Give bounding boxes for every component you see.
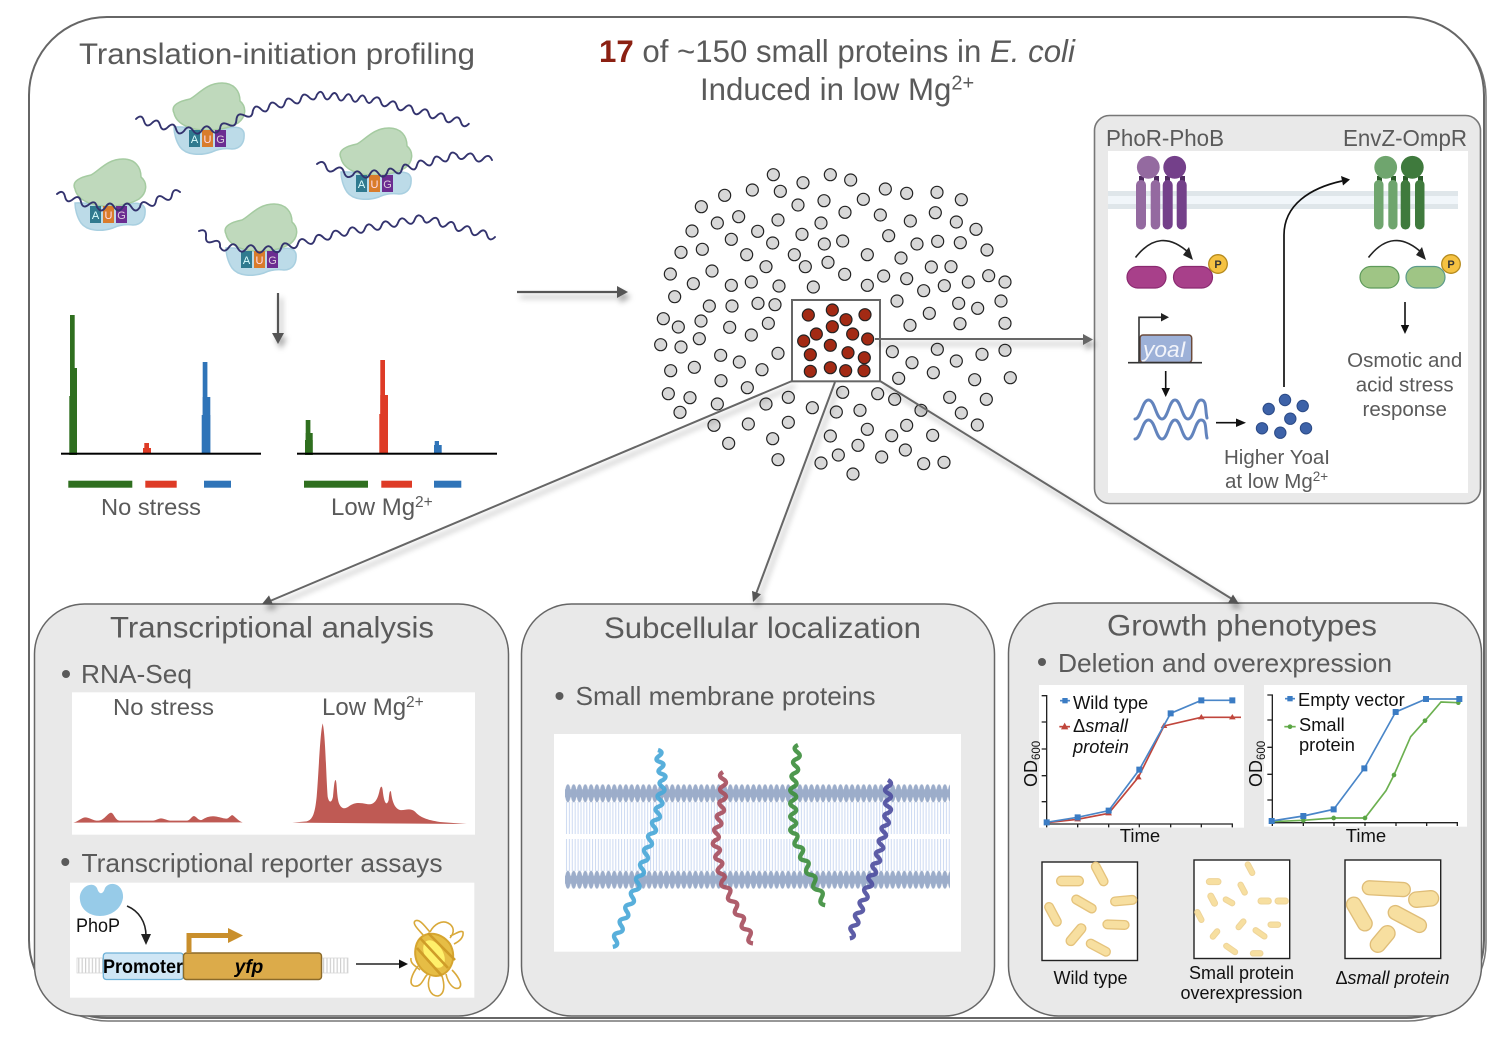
PhoB phosphorylation: [1127, 241, 1227, 288]
transcripts: [1135, 400, 1207, 439]
helix: red: [713, 772, 753, 943]
heading: 17 of 150 small proteins: Induced in low Mg: [700, 72, 951, 107]
heading: 17 of 150 small proteins: [599, 34, 1076, 107]
arrow: profiling to protein field: [517, 286, 628, 298]
label: PhoP: PhoP: [76, 916, 120, 937]
ribosome 1: A: [191, 134, 199, 146]
label: EnvZ-OmpR: EnvZ-OmpR: [1343, 125, 1467, 151]
legend text: Empty vector: [1298, 689, 1405, 710]
trace: low Mg: [292, 723, 467, 824]
cells: deletion: [1344, 860, 1441, 958]
transcription arrow: [189, 928, 243, 953]
ribosome 4: G: [268, 255, 277, 267]
label: osmotic and acid stress response: acid stress: [1356, 374, 1454, 396]
YoaI protein dots: [1256, 394, 1312, 438]
yfp gene: yfp: [234, 957, 263, 978]
label: small protein overexpression: Small protein: [1189, 963, 1294, 983]
arrow: ribosomes to profiles: [272, 293, 284, 344]
label: no stress: No stress: [113, 694, 214, 720]
heading: Subcellular localization: [604, 612, 921, 645]
cells: overexpression: [1194, 860, 1290, 958]
label: no stress: No stress: [101, 494, 201, 520]
ribosome 1: G: [216, 134, 225, 146]
heading: Transcriptional analysis: [110, 612, 434, 644]
arrow: transcript to protein: [1216, 418, 1246, 427]
red induced proteins: [798, 304, 874, 377]
receptor: EnvZ: [1374, 156, 1424, 230]
panel: transcriptional analysis: [34, 604, 508, 1016]
mRNA strands: [57, 92, 495, 253]
gene: yoaI: yoaI: [1141, 337, 1186, 362]
protein dots field: [655, 169, 1016, 480]
y label: OD: [1246, 760, 1266, 787]
PhoB phosphorylation: P: [1214, 259, 1222, 271]
yfp gene: [184, 953, 322, 980]
panel: two-component pathway: [1094, 116, 1480, 504]
overexpression curve: [1272, 700, 1461, 823]
icon: PhoP: [80, 884, 123, 916]
ribosome 3: G: [117, 210, 126, 222]
icon: YFP protein: [411, 920, 463, 996]
chart: empty vector vs overexpression: [1246, 685, 1467, 846]
membrane illustration: [554, 734, 961, 952]
ribosome 1: [173, 83, 245, 154]
OmpR phosphorylation: [1360, 241, 1460, 288]
heading: 17 of 150 small proteins: 17 of ~150 small proteins in E. coli: [599, 34, 1076, 69]
y label: 600: [1256, 741, 1268, 760]
OmpR phosphorylation: P: [1447, 259, 1455, 271]
bullet: small membrane proteins: Small membrane proteins: [576, 681, 876, 711]
arrow: PhoP to promoter: [127, 906, 151, 945]
y label: 600: [1031, 741, 1043, 760]
label: osmotic and acid stress response: response: [1363, 398, 1447, 421]
ribosome 4: [225, 204, 297, 275]
label: higher YoaI: at low Mg: [1225, 470, 1313, 493]
empty vector curve: [1269, 696, 1462, 824]
trace: no stress: [73, 813, 243, 823]
arrow: box to pathway panel: [875, 334, 1093, 345]
legend text: Small: [1299, 714, 1345, 735]
label: small protein overexpression: [1180, 963, 1303, 1003]
label: low Mg: 2+: [415, 494, 433, 511]
x label: Time: [1346, 825, 1386, 846]
legend text: Δsmall: [1073, 715, 1129, 736]
gray small proteins: [655, 169, 1016, 480]
arrow: box to transcriptional analysis: [262, 381, 792, 605]
receptor: PhoR: [1136, 156, 1187, 230]
arrow: OmpR to response: [1401, 302, 1409, 334]
ribosome 2: G: [383, 179, 392, 191]
ribosome 4: A: [243, 255, 251, 267]
chart: no stress ribosome profile: [61, 315, 261, 488]
axes: [1267, 695, 1457, 826]
legend text: [1072, 692, 1148, 757]
wild type curve: [1044, 697, 1235, 825]
chart: low Mg ribosome profile: [297, 360, 497, 488]
label: higher YoaI: 2+: [1313, 469, 1328, 484]
arrow: YoaI to EnvZ: [1284, 176, 1350, 387]
deletion curve: [1047, 714, 1241, 823]
ribosome 1: U: [204, 134, 212, 146]
legend markers: [1284, 696, 1296, 729]
panel: subcellular localization: [522, 604, 994, 1016]
bullet: deletion and overexpression: Deletion and overexpression: [1058, 648, 1392, 678]
legend text: protein: [1299, 734, 1355, 755]
x label: Time: [1120, 825, 1160, 846]
panel: growth phenotypes: [1008, 603, 1482, 1016]
promoter box: Promoter: [103, 957, 184, 978]
arrow: box to growth phenotypes: [880, 381, 1239, 604]
ribosome 3: A: [92, 210, 100, 222]
helix: purple: [850, 780, 891, 938]
label: higher YoaI: Higher YoaI: [1224, 446, 1330, 469]
gene: yoaI: [1128, 313, 1202, 363]
cells: wild type: [1042, 861, 1138, 960]
legend text: Wild type: [1073, 692, 1148, 713]
bullet: RNA-Seq: RNA-Seq: [81, 659, 192, 689]
helix: green: [790, 745, 825, 905]
label: wild type: Wild type: [1053, 968, 1128, 988]
label: PhoR-PhoB: PhoR-PhoB: [1106, 125, 1224, 151]
helix: blue: [613, 750, 666, 947]
label: osmotic and acid stress response: [1347, 349, 1462, 421]
RNA-Seq traces: [72, 692, 475, 835]
membrane: [1108, 191, 1458, 209]
ribosome 3: [74, 159, 146, 230]
label: deletion: Δsmall protein: [1335, 968, 1450, 988]
lipid bilayer: [565, 784, 950, 889]
arrow: gene to transcript: [1162, 371, 1170, 397]
ribosome 4: U: [256, 255, 264, 267]
label: small protein overexpression: overexpression: [1180, 983, 1303, 1003]
label: osmotic and acid stress response: Osmotic and: [1347, 349, 1462, 372]
legend markers: [1059, 698, 1070, 729]
reporter construct: [70, 883, 474, 998]
arrow: box to subcellular localization: [752, 382, 835, 602]
chart: wild type vs deletion: [1021, 685, 1244, 846]
label: low Mg: Low Mg: [322, 694, 406, 721]
bullet: reporter assays: Transcriptional reporter assays: [82, 848, 442, 878]
ribosome 2: U: [371, 179, 379, 191]
heading: translation-initiation profiling: Translation-initiation profiling: [79, 38, 475, 71]
y label: OD: [1021, 760, 1041, 787]
arrow: gene to protein: [356, 960, 408, 968]
label: low Mg: 2+: [406, 694, 424, 711]
label: low Mg: Low Mg: [331, 494, 415, 521]
DNA flanks: [77, 958, 348, 973]
label: higher YoaI: [1224, 446, 1330, 493]
ribosomes on mRNA: [57, 83, 495, 275]
heading: 17 of 150 small proteins: 2+: [951, 72, 974, 94]
axes: [1042, 696, 1232, 827]
selection box: [792, 300, 880, 381]
legend text: protein: [1072, 736, 1129, 757]
ribosome 3: U: [105, 210, 113, 222]
ribosome 2: A: [358, 179, 366, 191]
legend text: [1298, 689, 1405, 755]
ribosome 2: [340, 128, 412, 199]
heading: Growth phenotypes: [1107, 610, 1377, 642]
